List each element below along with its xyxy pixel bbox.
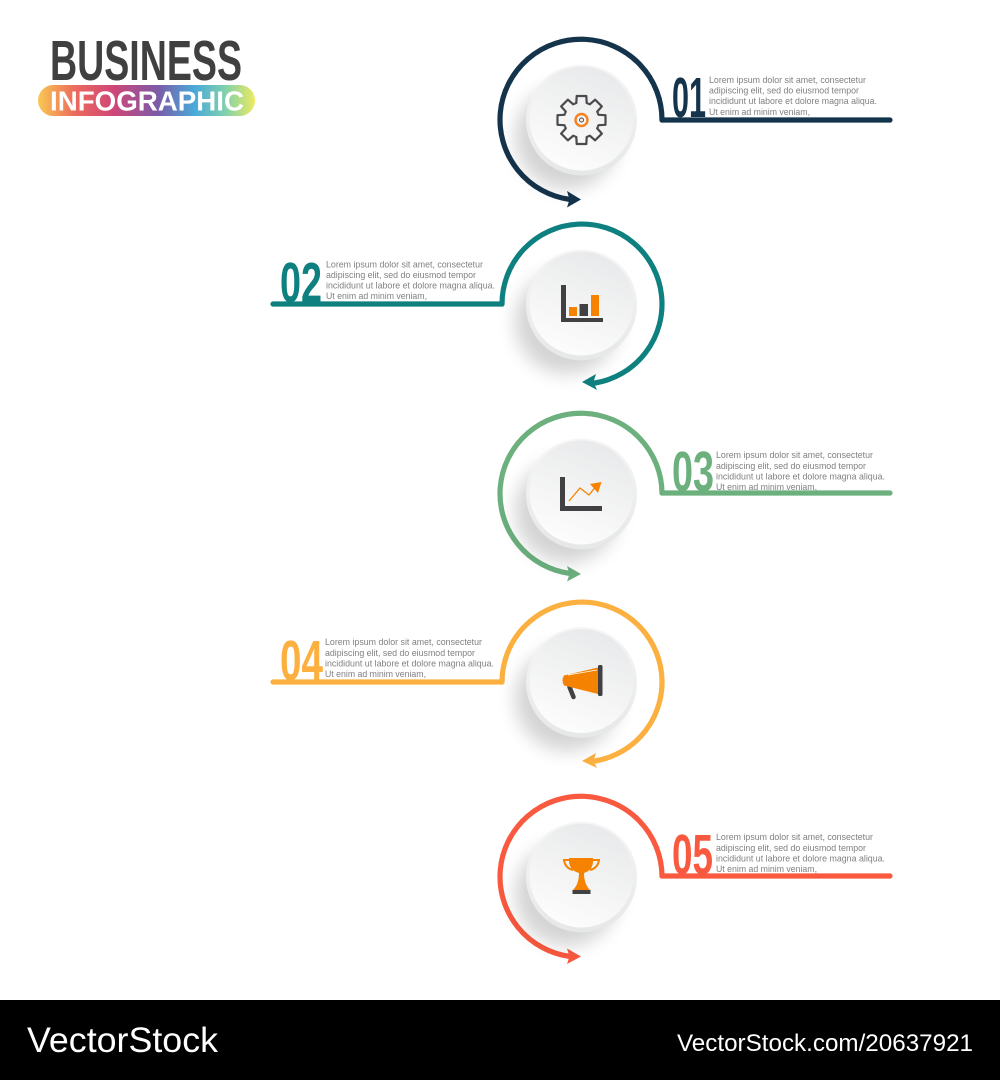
- arc and leader line: [500, 796, 890, 956]
- description text: Ut enim ad minim veniam,: [709, 107, 810, 117]
- description text: Ut enim ad minim veniam,: [716, 864, 817, 874]
- description text: incididunt ut labore et dolore magna aliqua.: [716, 472, 885, 482]
- description text: Ut enim ad minim veniam,: [325, 669, 426, 679]
- icon: megaphone: [562, 665, 602, 697]
- description text: incididunt ut labore et dolore magna aliqua.: [709, 96, 877, 106]
- arrow head: [567, 948, 581, 964]
- number 01: 01: [672, 66, 706, 130]
- disc with shadow: [515, 627, 637, 751]
- footer bar: [0, 1000, 1000, 1080]
- icon: gear: [558, 96, 606, 144]
- number 02: 02: [280, 251, 322, 315]
- disc with shadow: [515, 822, 637, 946]
- title word: BUSINESS: BUSINESS: [50, 29, 242, 93]
- description text: Lorem ipsum dolor sit amet, consectetur: [709, 75, 866, 85]
- step 03 panel: [500, 413, 890, 582]
- arrow head: [567, 566, 581, 582]
- disc with shadow: [515, 250, 637, 374]
- step 01 panel: [500, 39, 890, 208]
- arc and leader line: [273, 224, 662, 383]
- description text: [716, 450, 885, 492]
- arc and leader line: [500, 413, 890, 574]
- step 04 panel: [273, 602, 662, 768]
- description text: adipiscing elit, sed do eiusmod tempor: [716, 461, 866, 471]
- description text: Ut enim ad minim veniam,: [326, 291, 427, 301]
- arc and leader line: [500, 39, 890, 200]
- subtitle word: INFOGRAPHIC: INFOGRAPHIC: [50, 86, 244, 116]
- arrow head: [582, 753, 597, 768]
- description text: Lorem ipsum dolor sit amet, consectetur: [716, 450, 873, 460]
- number 05: 05: [672, 823, 713, 887]
- description text: adipiscing elit, sed do eiusmod tempor: [326, 270, 476, 280]
- disc with shadow: [515, 438, 637, 563]
- arrow head: [582, 374, 597, 390]
- description text: adipiscing elit, sed do eiusmod tempor: [709, 86, 859, 96]
- step 05 panel: [500, 796, 890, 964]
- description text: [709, 75, 877, 117]
- description text: Lorem ipsum dolor sit amet, consectetur: [325, 637, 482, 647]
- icon: bar chart: [561, 285, 603, 322]
- rainbow pill: [38, 85, 255, 116]
- footer logo: VectorStock: [27, 1021, 219, 1060]
- number 04: 04: [280, 629, 323, 693]
- number 03: 03: [672, 440, 714, 504]
- description text: adipiscing elit, sed do eiusmod tempor: [325, 648, 475, 658]
- icon: trophy: [564, 858, 599, 894]
- description text: [325, 637, 494, 679]
- title: business infographic: [38, 29, 255, 116]
- step 02 panel: [273, 224, 662, 390]
- arrow head: [567, 191, 581, 208]
- description text: adipiscing elit, sed do eiusmod tempor: [716, 843, 866, 853]
- disc with shadow: [515, 64, 637, 189]
- description text: Ut enim ad minim veniam,: [716, 482, 817, 492]
- description text: [326, 260, 495, 301]
- footer url: VectorStock.com/20637921: [677, 1030, 973, 1057]
- icon: line chart: [560, 477, 602, 511]
- description text: Lorem ipsum dolor sit amet, consectetur: [716, 832, 873, 842]
- description text: Lorem ipsum dolor sit amet, consectetur: [326, 260, 483, 270]
- description text: incididunt ut labore et dolore magna aliqua.: [326, 280, 495, 290]
- arc and leader line: [273, 602, 662, 761]
- description text: incididunt ut labore et dolore magna aliqua.: [716, 854, 885, 864]
- description text: incididunt ut labore et dolore magna aliqua.: [325, 658, 494, 668]
- description text: [716, 832, 885, 874]
